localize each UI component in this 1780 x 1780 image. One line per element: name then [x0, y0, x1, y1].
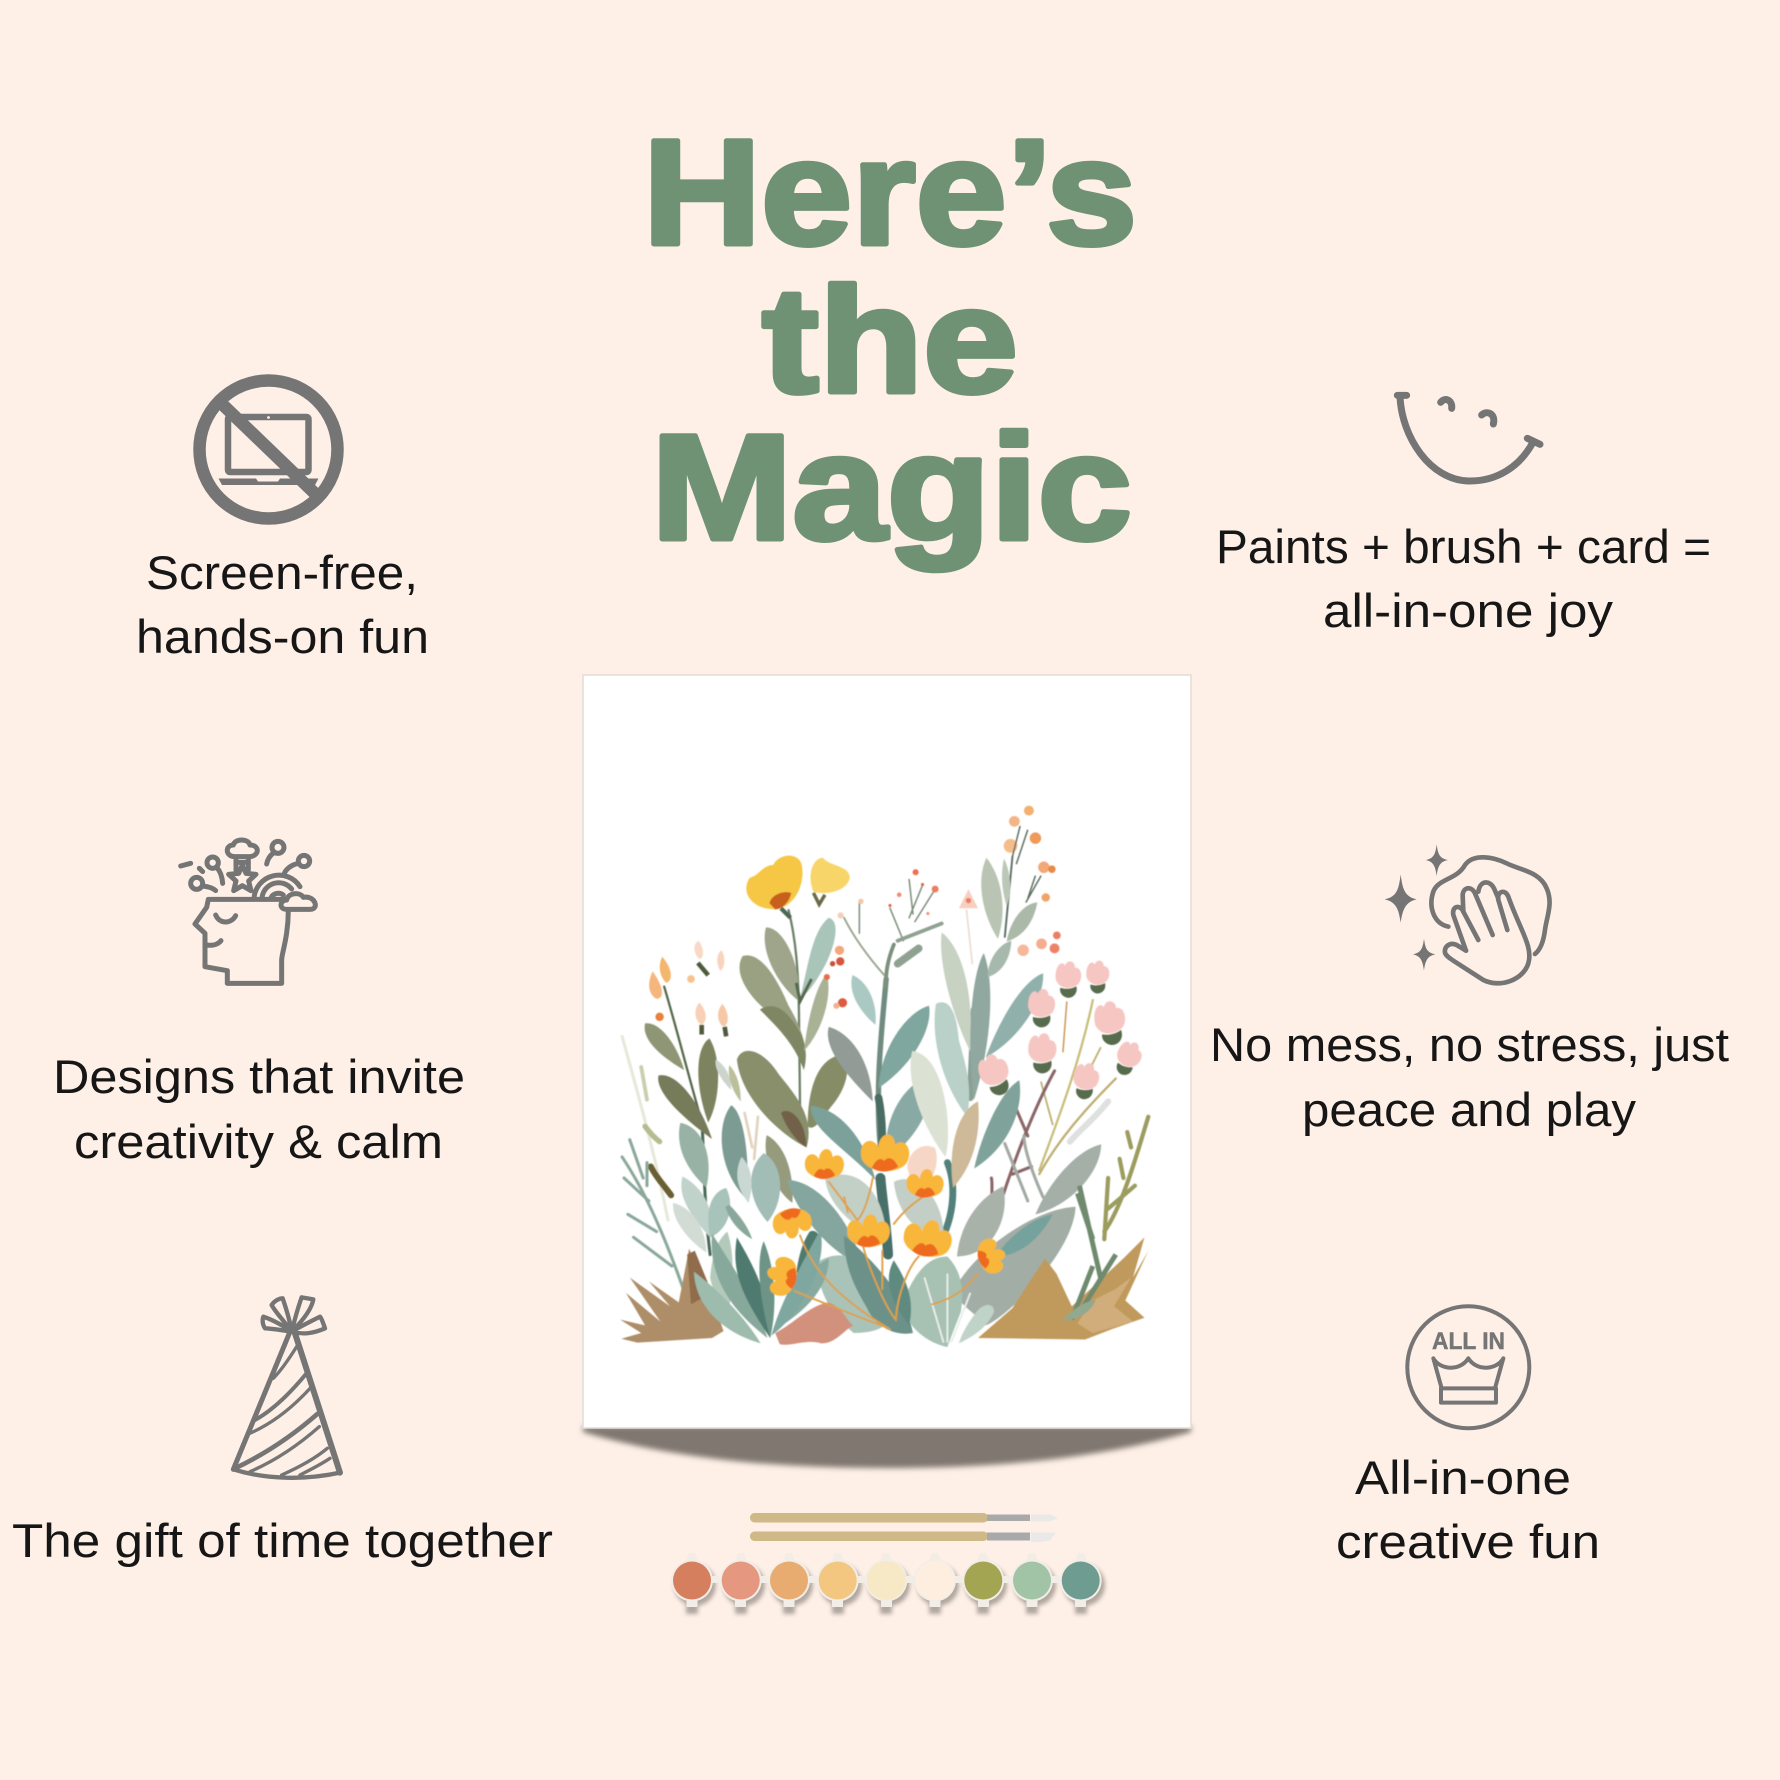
card: [583, 675, 1191, 1428]
left column: screen-free: [136, 380, 429, 663]
caption: [136, 546, 429, 663]
left column: gift of time: [12, 1297, 553, 1567]
illustration: watercolor wildflowers: [620, 806, 1148, 1347]
yellow flowers: [746, 856, 850, 918]
left column: creativity: [53, 840, 465, 1168]
caption: [53, 1050, 465, 1168]
title: [643, 108, 1137, 571]
brush 2: [750, 1532, 1056, 1542]
right column: creative fun: [1336, 1306, 1600, 1568]
caption: [1336, 1451, 1600, 1568]
icon: crossed-out laptop: [200, 380, 338, 518]
caption: Designs that invite: [53, 1050, 465, 1103]
caption: creativity & calm: [74, 1115, 443, 1168]
stems: [622, 857, 1148, 1289]
pot strip shadow: [674, 1564, 1105, 1614]
pot frame: [671, 1553, 1102, 1607]
foreground spiky leaves: [694, 1186, 1116, 1343]
caption: [1216, 520, 1711, 637]
lower leaf mass: [779, 1175, 1076, 1347]
card shadow: [583, 1426, 1191, 1468]
icon: head with ideas: [181, 840, 315, 983]
icon: ALL IN crown badge: [1407, 1306, 1529, 1428]
brush 1: [750, 1513, 1058, 1522]
icon: ALL IN crown badge: ALL IN: [1432, 1328, 1505, 1355]
painting card with floral illustration: [583, 675, 1191, 1428]
paintbrushes: [750, 1513, 1058, 1542]
caption: Screen-free,: [146, 546, 418, 599]
olive leaves: [645, 918, 847, 1203]
caption: hands-on fun: [136, 610, 429, 663]
rock: [775, 1302, 854, 1345]
icon: party hat: [233, 1297, 340, 1478]
orange flowers: [764, 1134, 1010, 1298]
caption: creative fun: [1336, 1515, 1600, 1568]
caption: all-in-one joy: [1323, 584, 1614, 637]
title: Here’s: [643, 108, 1137, 276]
pink flowers: [974, 961, 1146, 1101]
paint colours: [673, 1561, 1100, 1600]
teal and grey leaves: [673, 858, 1101, 1308]
caption: The gift of time together: [12, 1514, 553, 1567]
small orange and coral buds: [649, 806, 1061, 1036]
caption: Paints + brush + card =: [1216, 520, 1711, 573]
title: the: [762, 256, 1018, 424]
faint background grasses: [622, 1036, 1108, 1220]
paint pot strip: [671, 1553, 1105, 1614]
caption: peace and play: [1302, 1083, 1637, 1136]
caption: No mess, no stress, just: [1210, 1018, 1729, 1071]
caption: All-in-one: [1355, 1451, 1571, 1504]
orange flower stems: [794, 1178, 978, 1329]
right column: all-in-one joy: [1216, 395, 1711, 637]
title: Magic: [651, 403, 1132, 571]
icon: hand wiping with sparkles: [1385, 844, 1550, 983]
caption: [1210, 1018, 1729, 1136]
right column: no mess: [1210, 844, 1729, 1136]
icon: smile: [1397, 395, 1540, 481]
ground tufts: [620, 1237, 1148, 1343]
